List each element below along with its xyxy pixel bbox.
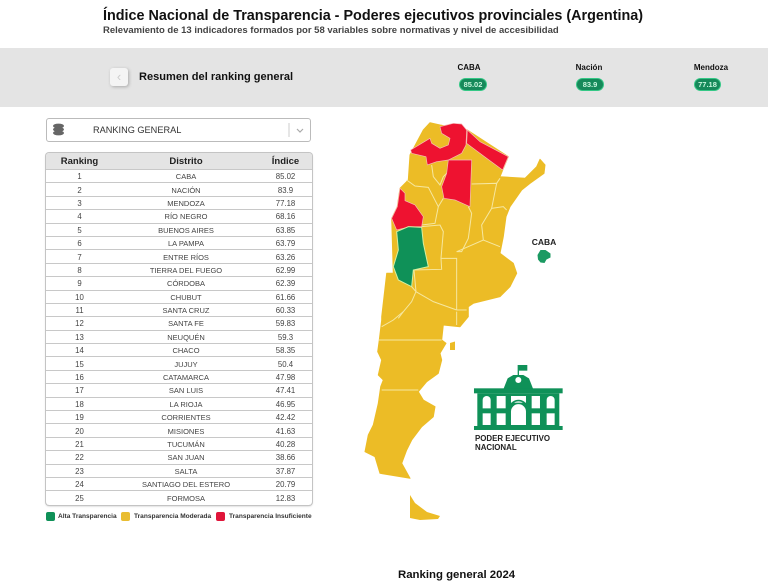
- ranking table: Ranking: [61, 156, 98, 167]
- ranking table: 5: [77, 226, 82, 235]
- icon: layers: [53, 124, 64, 136]
- ranking table: RÍO NEGRO: [165, 212, 207, 221]
- kpi: Nación: [576, 63, 604, 91]
- ranking table: LA RIOJA: [170, 400, 202, 409]
- ranking table: 62.99: [276, 266, 295, 275]
- ranking table: BUENOS AIRES: [158, 226, 214, 235]
- ranking table: 8: [77, 266, 82, 275]
- icon: chevron: [288, 123, 304, 137]
- ranking table: 23: [75, 467, 84, 476]
- ranking table: 63.26: [276, 253, 295, 262]
- icon: back button: ‹: [117, 69, 121, 84]
- ranking table: 77.18: [276, 199, 295, 208]
- subtitle: Relevamiento de 13 indicadores formados por 58 variables sobre normativas y nivel de accesibilidad: [103, 25, 559, 36]
- map label: CABA: CABA: [532, 237, 556, 247]
- ranking table: SANTA FE: [168, 319, 204, 328]
- ranking table: 2: [77, 186, 82, 195]
- ranking table: 50.4: [278, 360, 293, 369]
- ranking table: 1: [77, 172, 82, 181]
- ranking table: 9: [77, 279, 82, 288]
- ranking table: 16: [75, 373, 84, 382]
- icon: government building: [474, 365, 563, 430]
- ranking table: [46, 153, 312, 505]
- ranking table: SAN JUAN: [167, 453, 205, 462]
- kpi: Mendoza: Mendoza: [694, 63, 728, 72]
- map: provinces: [365, 123, 545, 520]
- ranking table: 47.41: [276, 386, 295, 395]
- ranking table: CHUBUT: [170, 293, 202, 302]
- ranking table: SANTIAGO DEL ESTERO: [142, 480, 230, 489]
- ranking table: 18: [75, 400, 84, 409]
- dropdown label: RANKING GENERAL: [93, 125, 181, 135]
- ranking table: 20: [75, 427, 84, 436]
- ranking table: 37.87: [276, 467, 295, 476]
- ranking table: JUJUY: [174, 360, 198, 369]
- ranking table: MENDOZA: [167, 199, 205, 208]
- ranking table: 42.42: [276, 413, 295, 422]
- legend: Transparencia Insuficiente: [229, 513, 312, 520]
- kpi: Mendoza: [694, 63, 728, 91]
- ranking table: 4: [77, 212, 82, 221]
- ranking table: 63.79: [276, 239, 295, 248]
- summary heading: Resumen del ranking general: [139, 71, 293, 83]
- ranking table: 63.85: [276, 226, 295, 235]
- ranking table: 40.28: [276, 440, 295, 449]
- ranking table: 14: [75, 346, 84, 355]
- ranking table: 59.83: [276, 319, 295, 328]
- ranking table: 12: [75, 319, 84, 328]
- ranking table: 21: [75, 440, 84, 449]
- ranking table: 85.02: [276, 172, 295, 181]
- ranking table: Distrito: [169, 156, 203, 167]
- ranking table: 61.66: [276, 293, 295, 302]
- ranking table: 7: [77, 253, 82, 262]
- building caption: PODER EJECUTIVO: [475, 434, 550, 443]
- title: Índice Nacional de Transparencia - Poderes ejecutivos provinciales (Argentina): [103, 8, 643, 24]
- ranking table: SANTA CRUZ: [163, 306, 209, 315]
- ranking table: 10: [75, 293, 84, 302]
- ranking table: CÓRDOBA: [167, 279, 205, 288]
- ranking table: 38.66: [276, 453, 295, 462]
- ranking table: 3: [77, 199, 82, 208]
- ranking table: TIERRA DEL FUEGO: [150, 266, 222, 275]
- ranking table: CORRIENTES: [161, 413, 211, 422]
- legend: Transparencia Moderada: [134, 513, 211, 520]
- ranking table: 13: [75, 333, 84, 342]
- ranking table: 25: [75, 494, 84, 503]
- ranking table: CATAMARCA: [163, 373, 209, 382]
- icon: back button: [110, 68, 128, 86]
- ranking table: TUCUMÁN: [167, 440, 205, 449]
- kpi: CABA: [457, 63, 487, 91]
- ranking table: 83.9: [278, 186, 293, 195]
- ranking table: 12.83: [276, 494, 295, 503]
- ranking table: 46.95: [276, 400, 295, 409]
- panel: summary band: [0, 48, 768, 107]
- ranking table: 41.63: [276, 427, 295, 436]
- ranking table: 15: [75, 360, 84, 369]
- footer caption: Ranking general 2024: [398, 569, 515, 581]
- ranking table: 20.79: [276, 480, 295, 489]
- legend: Alta Transparencia: [58, 513, 117, 520]
- kpi: CABA: 85.02: [464, 80, 482, 89]
- kpi: CABA: CABA: [457, 63, 481, 72]
- ranking table: 6: [77, 239, 82, 248]
- ranking table: 11: [75, 306, 84, 315]
- map marker: CABA: [538, 250, 550, 263]
- ranking table: CABA: [176, 172, 196, 181]
- ranking table: 24: [75, 480, 84, 489]
- ranking table: 19: [75, 413, 84, 422]
- ranking table: LA PAMPA: [168, 239, 204, 248]
- dropdown: ranking selector: [46, 118, 311, 142]
- ranking table: CHACO: [172, 346, 200, 355]
- ranking table: Índice: [272, 156, 299, 167]
- kpi: Nación: Nación: [576, 63, 602, 72]
- ranking table: 60.33: [276, 306, 295, 315]
- building caption: NACIONAL: [475, 443, 517, 452]
- ranking table: SALTA: [175, 467, 197, 476]
- kpi: Nación: 83.9: [583, 80, 597, 89]
- ranking table: SAN LUIS: [169, 386, 203, 395]
- ranking table: 17: [75, 386, 84, 395]
- kpi: Mendoza: 77.18: [698, 80, 717, 89]
- ranking table: 22: [75, 453, 84, 462]
- ranking table: 59.3: [278, 333, 293, 342]
- ranking table: 47.98: [276, 373, 295, 382]
- ranking table: ENTRE RÍOS: [163, 253, 209, 262]
- legend: [46, 512, 312, 521]
- ranking table: 62.39: [276, 279, 295, 288]
- ranking table: NEUQUÉN: [167, 333, 205, 342]
- ranking table: NACIÓN: [171, 186, 201, 195]
- ranking table: MISIONES: [168, 427, 204, 436]
- ranking table: FORMOSA: [167, 494, 205, 503]
- ranking table: 58.35: [276, 346, 295, 355]
- ranking table: 68.16: [276, 212, 295, 221]
